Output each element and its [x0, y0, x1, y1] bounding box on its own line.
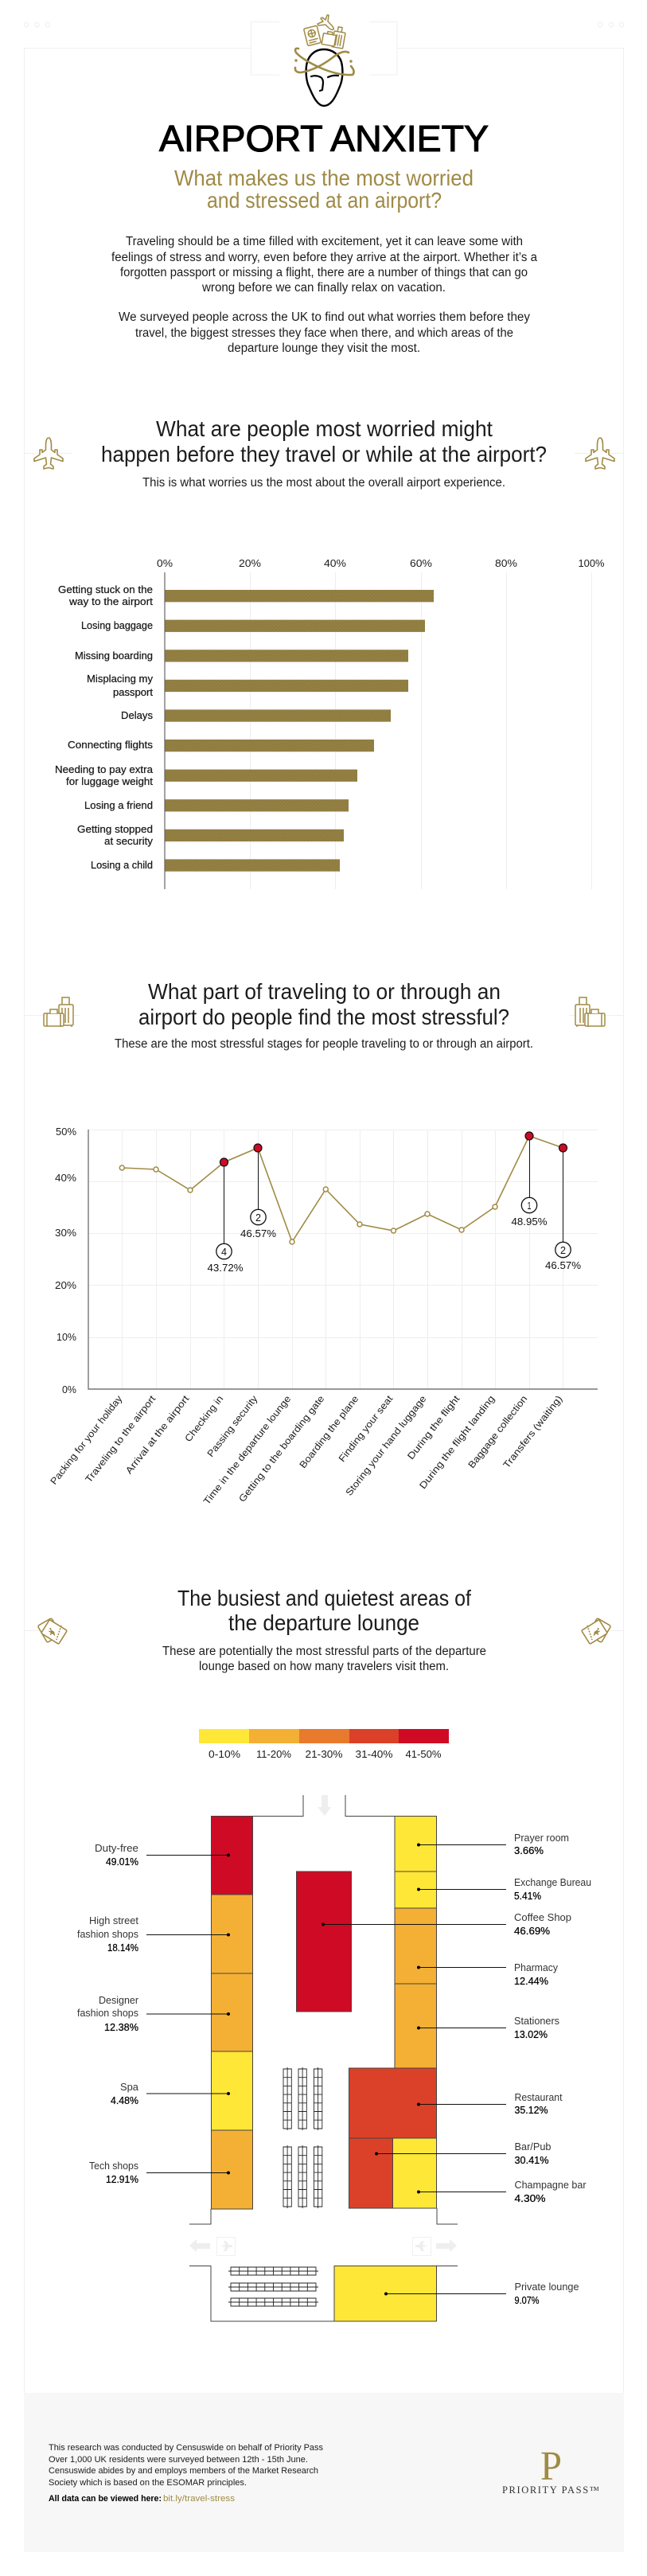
- heading: stressful stages: airport do people find the most stressful?: [138, 1005, 509, 1029]
- data points: [119, 1165, 497, 1244]
- right shop labels: 46.69%: [514, 1925, 550, 1937]
- bar labels: Missing boarding: [75, 650, 153, 662]
- left shop labels: 12.91%: [106, 2173, 138, 2185]
- right shop labels: 4.30%: [514, 2192, 546, 2204]
- left shop labels: Designer: [99, 1994, 139, 2006]
- bar labels: passport: [113, 687, 154, 698]
- x axis labels: Packing for your holiday: [48, 1393, 124, 1487]
- left shop labels: 49.01%: [106, 1856, 138, 1868]
- icon: suitcase: [322, 25, 346, 49]
- callout: rank 1: [511, 1197, 548, 1228]
- subheading: departure lounge: lounge based on how many travelers visit them.: [199, 1660, 449, 1673]
- subtitle: and stressed at an airport?: [207, 188, 442, 213]
- heading: worries: happen before they travel or while at the airport?: [101, 442, 547, 466]
- right shop labels: 5.41%: [514, 1890, 541, 1902]
- bar labels: Getting stopped: [77, 824, 153, 835]
- legend: 0-10%: [209, 1749, 240, 1760]
- right column shops: [334, 1817, 436, 2321]
- subheading: departure lounge: These are potentially the most stressful parts of the departure: [162, 1645, 486, 1658]
- x axis labels: During the flight landing: [417, 1393, 497, 1491]
- x axis labels: Traveling to the airport: [83, 1393, 158, 1485]
- bar labels: Connecting flights: [68, 740, 153, 751]
- subheading: worries: This is what worries us the most about the overall airport experience.: [142, 476, 505, 490]
- x axis labels: During the flight: [405, 1393, 462, 1462]
- left shop labels: 4.48%: [111, 2094, 138, 2106]
- left shop labels: fashion shops: [77, 1928, 138, 1940]
- heading: stressful stages: [138, 979, 509, 1029]
- bar labels: Delays: [121, 710, 153, 721]
- intro text: forgotten passport or missing a flight, there are a number of things that can go: [120, 266, 528, 279]
- subtitle: [174, 166, 474, 213]
- logo: Priority Pass: P: [540, 2444, 562, 2489]
- x axis labels: Checking in: [182, 1393, 225, 1444]
- coffee shop block: [296, 1872, 352, 2012]
- right shop labels: Bar/Pub: [514, 2141, 551, 2153]
- methodology text: This research was conducted by Censuswide on behalf of Priority Pass: [49, 2443, 323, 2453]
- intro text: departure lounge they visit the most.: [228, 342, 420, 355]
- heading: worries: [101, 416, 547, 466]
- walls: [189, 1795, 458, 2321]
- callout: rank 1: 48.95%: [511, 1216, 548, 1228]
- heading: stressful stages: What part of traveling to or through an: [148, 979, 501, 1004]
- bar labels: way to the airport: [68, 596, 154, 607]
- axis labels: 100%: [578, 558, 605, 569]
- leader lines: [146, 1844, 506, 2296]
- icon: luggage right: [575, 997, 605, 1027]
- intro text: [111, 235, 537, 355]
- bar labels: at security: [104, 836, 154, 847]
- callout: rank 2 transfers: [545, 1242, 581, 1271]
- intro text: feelings of stress and worry, even before they arrive at the airport. Whether it’s a: [111, 251, 537, 264]
- axis labels: [157, 558, 605, 569]
- icon: luggage left: [44, 997, 73, 1027]
- methodology text: All data can be viewed here:: [49, 2494, 162, 2504]
- methodology text: bit.ly/travel-stress: [163, 2494, 236, 2504]
- heading: worries: What are people most worried might: [156, 416, 493, 441]
- bar chart: worries: [55, 558, 605, 889]
- x axis labels: Transfers (waiting): [501, 1393, 564, 1470]
- icon: plane right: [586, 438, 614, 469]
- legend: 21-30%: [306, 1749, 342, 1760]
- subheading: stressful stages: These are the most stressful stages for people traveling to or through an airport.: [115, 1037, 533, 1051]
- y axis labels: 20%: [55, 1280, 76, 1291]
- subheading: departure lounge: [162, 1645, 486, 1673]
- y axis labels: 40%: [55, 1173, 76, 1184]
- methodology text: Society which is based on the ESOMAR principles.: [49, 2478, 247, 2488]
- left shop labels: [77, 1842, 139, 2185]
- x axis labels: Passing security: [205, 1393, 259, 1459]
- methodology text: [49, 2443, 323, 2504]
- right shop labels: 12.44%: [514, 1975, 548, 1987]
- footer panel: [24, 2393, 624, 2552]
- y axis labels: [55, 1126, 76, 1395]
- title: AIRPORT ANXIETY: [159, 118, 489, 159]
- logo: Priority Pass: PRIORITY PASS™: [502, 2484, 599, 2496]
- x axis labels: [48, 1393, 564, 1507]
- axis labels: 60%: [410, 558, 432, 569]
- callout: rank 2: 2: [255, 1212, 261, 1224]
- x axis labels: Getting to the boarding gate: [236, 1393, 327, 1505]
- icon: plane left: [34, 438, 63, 469]
- x axis labels: Boarding the plane: [297, 1393, 361, 1470]
- subtitle: What makes us the most worried: [174, 166, 474, 190]
- bar labels: Misplacing my: [87, 673, 154, 685]
- callout: rank 2: [240, 1209, 276, 1239]
- y axis labels: 50%: [56, 1126, 76, 1138]
- right shop labels: [514, 1832, 591, 2306]
- axis labels: 80%: [495, 558, 517, 569]
- y axis labels: 30%: [55, 1228, 76, 1239]
- right shop labels: 3.66%: [514, 1844, 544, 1856]
- heading: departure lounge: [177, 1586, 471, 1635]
- left shop labels: High street: [89, 1914, 138, 1926]
- callout: rank 1: 1: [527, 1200, 532, 1212]
- right shop labels: Champagne bar: [514, 2179, 587, 2191]
- bar labels: Getting stuck on the: [58, 584, 153, 595]
- callout: rank 4: [207, 1243, 244, 1274]
- heading: departure lounge: The busiest and quietest areas of: [177, 1586, 471, 1610]
- intro text: We surveyed people across the UK to find out what worries them before they: [119, 310, 530, 324]
- x axis labels: Baggage collection: [466, 1393, 529, 1470]
- right shop labels: Restaurant: [514, 2091, 563, 2103]
- intro text: wrong before we can finally relax on vacation.: [201, 281, 446, 295]
- data line: [122, 1136, 563, 1242]
- icon: head outline: [306, 49, 342, 106]
- y axis labels: 10%: [57, 1332, 76, 1343]
- legend: 11-20%: [256, 1749, 291, 1760]
- callout: rank 2: 46.57%: [240, 1228, 276, 1239]
- right shop labels: 13.02%: [514, 2028, 548, 2040]
- callout: rank 4: 43.72%: [207, 1262, 244, 1274]
- left column shops: [212, 1817, 253, 2209]
- x axis labels: Arrival at the airport: [123, 1393, 192, 1476]
- logo: Priority Pass: [502, 2444, 599, 2496]
- heading: departure lounge: the departure lounge: [228, 1610, 419, 1635]
- icon: ticket left: [37, 1618, 67, 1644]
- icon: orbit rings: [295, 49, 354, 75]
- left shop labels: Tech shops: [89, 2160, 138, 2172]
- x axis labels: Finding your seat: [337, 1393, 396, 1464]
- right shop labels: Stationers: [514, 2015, 559, 2027]
- highlighted points: [220, 1132, 567, 1166]
- icon: passport: [304, 25, 321, 46]
- right shop labels: Pharmacy: [514, 1961, 558, 1973]
- legend: [199, 1729, 449, 1760]
- x axis labels: Time in the departure lounge: [201, 1393, 294, 1507]
- right shop labels: Private lounge: [514, 2281, 579, 2293]
- bar labels: for luggage weight: [66, 776, 154, 787]
- axis labels: 40%: [324, 558, 346, 569]
- left shop labels: 18.14%: [107, 1942, 138, 1953]
- bar labels: Losing baggage: [81, 620, 153, 631]
- bar labels: [55, 584, 154, 871]
- callout: rank 2 transfers: 46.57%: [545, 1259, 581, 1271]
- bar labels: Losing a child: [91, 860, 153, 871]
- axis labels: 0%: [157, 558, 173, 569]
- right shop labels: Coffee Shop: [514, 1911, 571, 1923]
- left shop labels: 12.38%: [104, 2021, 138, 2033]
- right shop labels: 35.12%: [514, 2104, 548, 2116]
- callout: rank 4: 4: [221, 1246, 227, 1258]
- x axis labels: Storing your hand luggage: [343, 1393, 429, 1498]
- intro text: Traveling should be a time filled with excitement, yet it can leave some with: [126, 235, 523, 248]
- legend: 31-40%: [355, 1749, 393, 1760]
- callout: rank 2 transfers: 2: [560, 1244, 566, 1256]
- left shop labels: Duty-free: [95, 1842, 138, 1854]
- methodology text: Over 1,000 UK residents were surveyed between 12th - 15th June.: [49, 2455, 308, 2465]
- axis labels: 20%: [239, 558, 261, 569]
- bars: [165, 590, 434, 872]
- icon: ticket right: [582, 1618, 611, 1644]
- seating: [228, 2067, 322, 2306]
- y axis labels: 0%: [62, 1384, 76, 1395]
- callout stems: [224, 1136, 563, 1243]
- corridor arrows: [189, 1795, 457, 2256]
- icon: anxious head with travel items: [295, 15, 354, 106]
- intro text: travel, the biggest stresses they face when there, and which areas of the: [135, 326, 513, 340]
- methodology text: Censuswide abides by and employs members of the Market Research: [49, 2466, 318, 2476]
- bar labels: Losing a friend: [84, 800, 153, 811]
- right shop labels: Prayer room: [514, 1832, 569, 1844]
- left shop labels: fashion shops: [77, 2007, 138, 2019]
- line chart: stress by stage: [48, 1126, 598, 1507]
- legend: 41-50%: [406, 1749, 441, 1760]
- icon: plane: [318, 15, 333, 29]
- right shop labels: 30.41%: [514, 2154, 549, 2166]
- bar labels: Needing to pay extra: [55, 764, 153, 775]
- left shop labels: Spa: [120, 2081, 139, 2093]
- floor plan: departure lounge: [77, 1795, 591, 2321]
- right shop labels: Exchange Bureau: [514, 1876, 591, 1888]
- right shop labels: 9.07%: [514, 2294, 540, 2306]
